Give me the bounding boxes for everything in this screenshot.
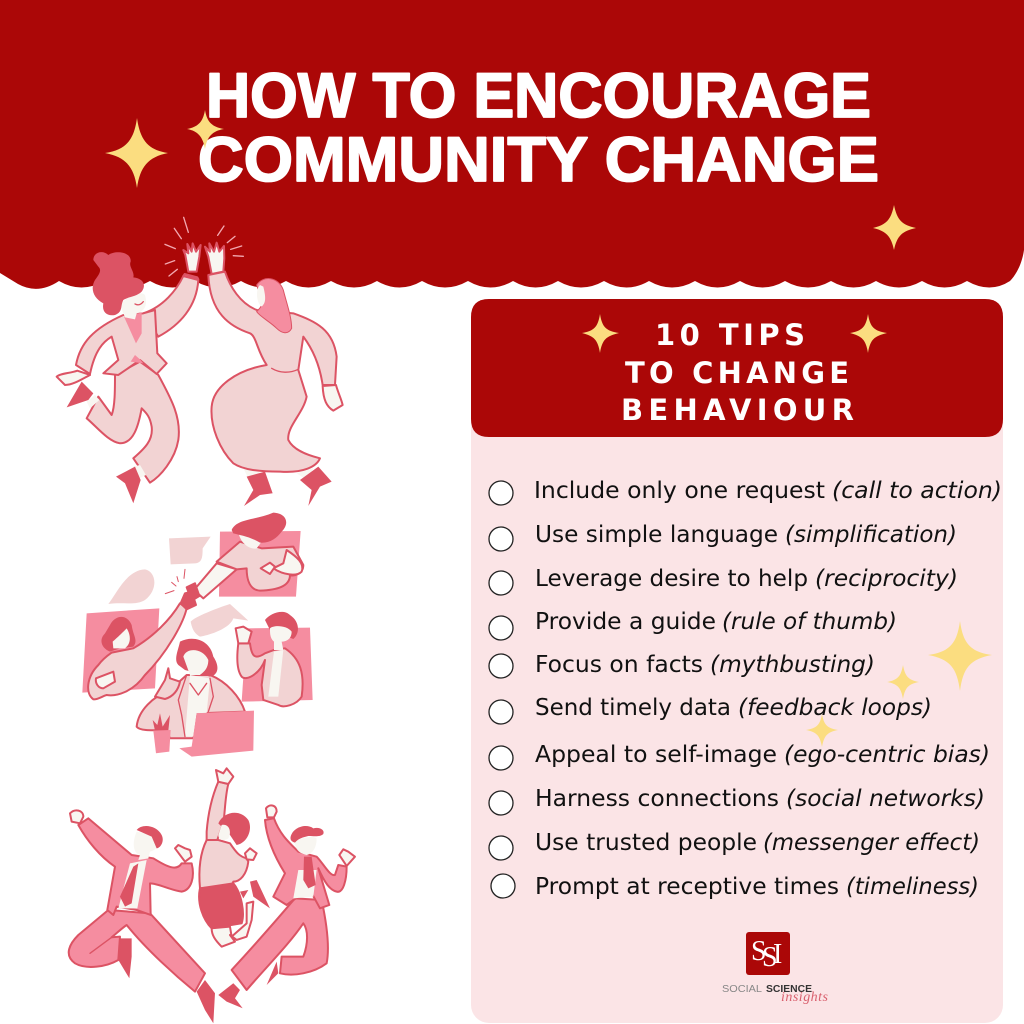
title [198, 61, 879, 195]
tips heading box [471, 299, 1003, 437]
icon: large sparkle left of title [105, 118, 168, 188]
panel: tips card [471, 299, 1003, 1023]
speech bubbles [108, 537, 248, 637]
tip 3 [489, 566, 958, 595]
logo: Social Science Insights: SOCIAL [722, 984, 762, 995]
illustration: video call team [82, 513, 313, 757]
tip 9 [489, 830, 980, 860]
tip 5: Focus on facts [535, 652, 703, 678]
tip 4 [489, 609, 897, 640]
logo: Social Science Insights [722, 932, 829, 1005]
tip 8: Harness connections [535, 786, 779, 812]
tip 7 [489, 742, 990, 770]
tip 2 [489, 522, 957, 551]
title: HOW TO ENCOURAGE [206, 61, 871, 131]
left woman [88, 592, 196, 699]
logo: Social Science Insights: SCIENCE [766, 984, 812, 995]
icon: card sparkle medium [887, 665, 919, 699]
logo: Social Science Insights: SSI [751, 936, 782, 973]
tip 7: (ego-centric bias) [784, 742, 990, 768]
tips heading box: TO CHANGE [625, 356, 849, 390]
icon: heading sparkle left [582, 314, 619, 353]
icon: card sparkle large [928, 621, 992, 691]
center woman with laptop [137, 639, 254, 757]
tip 8 [489, 786, 985, 815]
clap rays [165, 217, 243, 276]
illustration: two women high-five [57, 217, 343, 506]
tips heading box: BEHAVIOUR [621, 393, 854, 427]
tip 3: Leverage desire to help [535, 566, 808, 592]
tip 3: (reciprocity) [815, 566, 958, 592]
top woman [194, 513, 303, 598]
left man [69, 810, 215, 1023]
tip 5 [489, 652, 875, 678]
tip 8: (social networks) [786, 786, 985, 812]
tip 4: (rule of thumb) [722, 609, 897, 635]
tip 10: (timeliness) [846, 874, 979, 900]
video tile backgrounds [82, 531, 313, 702]
tip 1: (call to action) [832, 478, 1002, 504]
right person [236, 612, 303, 706]
tip 6: (feedback loops) [738, 695, 932, 721]
tip 9: Use trusted people [535, 830, 757, 856]
icon: small sparkle on title [187, 110, 224, 149]
tip 2: Use simple language [535, 522, 778, 548]
tip 6 [489, 695, 932, 724]
right man [218, 805, 355, 1008]
title: COMMUNITY CHANGE [198, 125, 879, 195]
icon: card sparkle small [806, 714, 838, 747]
top woman hand meeting [187, 583, 199, 601]
left woman [57, 243, 201, 503]
tip 1: Include only one request [534, 478, 825, 504]
tip 5: (mythbusting) [710, 652, 875, 678]
tip 10: Prompt at receptive times [535, 874, 839, 900]
tip 6: Send timely data [535, 695, 731, 721]
tip 7: Appeal to self-image [535, 742, 777, 768]
header banner with scalloped edge [0, 0, 1024, 289]
high-five rays [165, 569, 185, 594]
middle woman [199, 768, 270, 947]
tip 2: (simplification) [785, 522, 957, 548]
logo: Social Science Insights: insights [781, 990, 829, 1005]
tip 9: (messenger effect) [763, 830, 980, 856]
tip 10 [491, 874, 979, 900]
illustration: three colleagues jumping [69, 768, 355, 1023]
tip 4: Provide a guide [535, 609, 716, 635]
tips heading box: 10 TIPS [655, 318, 805, 352]
icon: heading sparkle right [850, 314, 887, 353]
right woman [205, 243, 343, 506]
icon: sparkle right of banner [873, 205, 916, 250]
tip 1 [489, 478, 1002, 505]
